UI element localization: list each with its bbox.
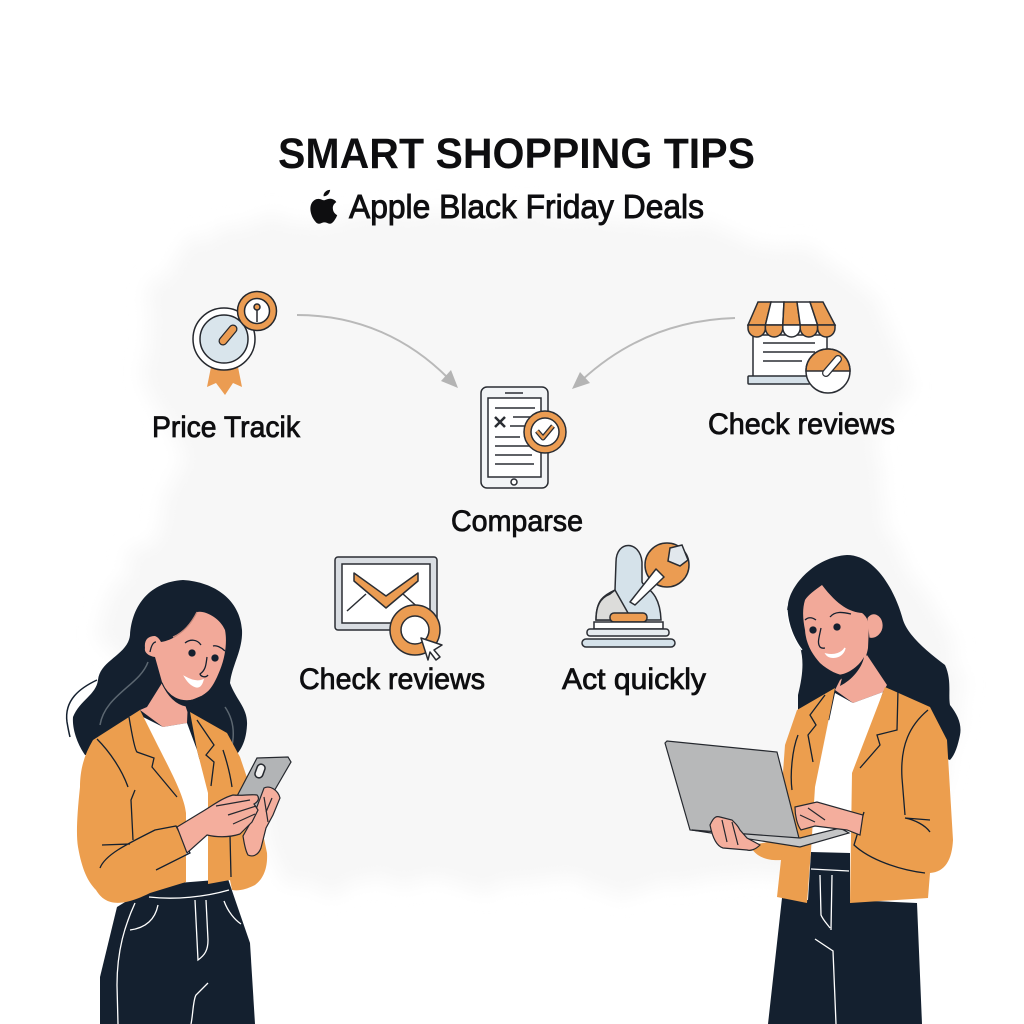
title: SMART SHOPPING TIPS xyxy=(278,130,755,178)
pants seams xyxy=(117,890,241,1024)
icon: tablet with check badge xyxy=(481,387,566,488)
label: price track: Price Tracik xyxy=(152,411,301,444)
face xyxy=(803,585,869,675)
pants seams xyxy=(811,869,849,1024)
label: act quickly: Act quickly xyxy=(562,663,706,696)
neck xyxy=(140,683,188,727)
jaw line xyxy=(162,683,200,712)
icon: bell button with pointer xyxy=(582,543,689,647)
neck xyxy=(835,655,887,703)
facial features xyxy=(805,612,851,657)
illustration: woman with laptop xyxy=(665,555,961,1024)
label: check reviews bottom: Check reviews xyxy=(299,663,485,696)
laptop xyxy=(665,741,800,842)
hands xyxy=(177,787,280,856)
facial features xyxy=(150,612,225,687)
face xyxy=(145,612,226,701)
arrow: price track to compare xyxy=(297,315,458,388)
icon: price tracker badge xyxy=(193,292,276,395)
pants xyxy=(100,879,255,1024)
icon: apple logo xyxy=(310,190,337,224)
jacket xyxy=(750,687,953,903)
hair xyxy=(787,555,961,760)
jaw line xyxy=(834,657,864,686)
jacket lines xyxy=(97,717,232,877)
jacket lines xyxy=(791,690,930,873)
pants xyxy=(768,852,922,1024)
hands xyxy=(710,802,863,850)
phone xyxy=(235,757,291,827)
icon: envelope with cursor xyxy=(335,557,442,660)
hair xyxy=(73,580,247,760)
jacket xyxy=(77,710,267,903)
strand xyxy=(787,610,802,650)
illustration: woman with phone xyxy=(67,580,291,1024)
subtitle with apple logo: Apple Black Friday Deals xyxy=(349,188,704,225)
icon: shop with badge xyxy=(748,302,850,393)
ear xyxy=(867,614,883,638)
shirt xyxy=(812,692,883,855)
shirt xyxy=(143,717,208,885)
label: check reviews top: Check reviews xyxy=(708,408,895,441)
label: compare: Comparse xyxy=(451,505,583,538)
arrow: check reviews to compare xyxy=(572,318,735,389)
hair strands xyxy=(67,680,97,737)
